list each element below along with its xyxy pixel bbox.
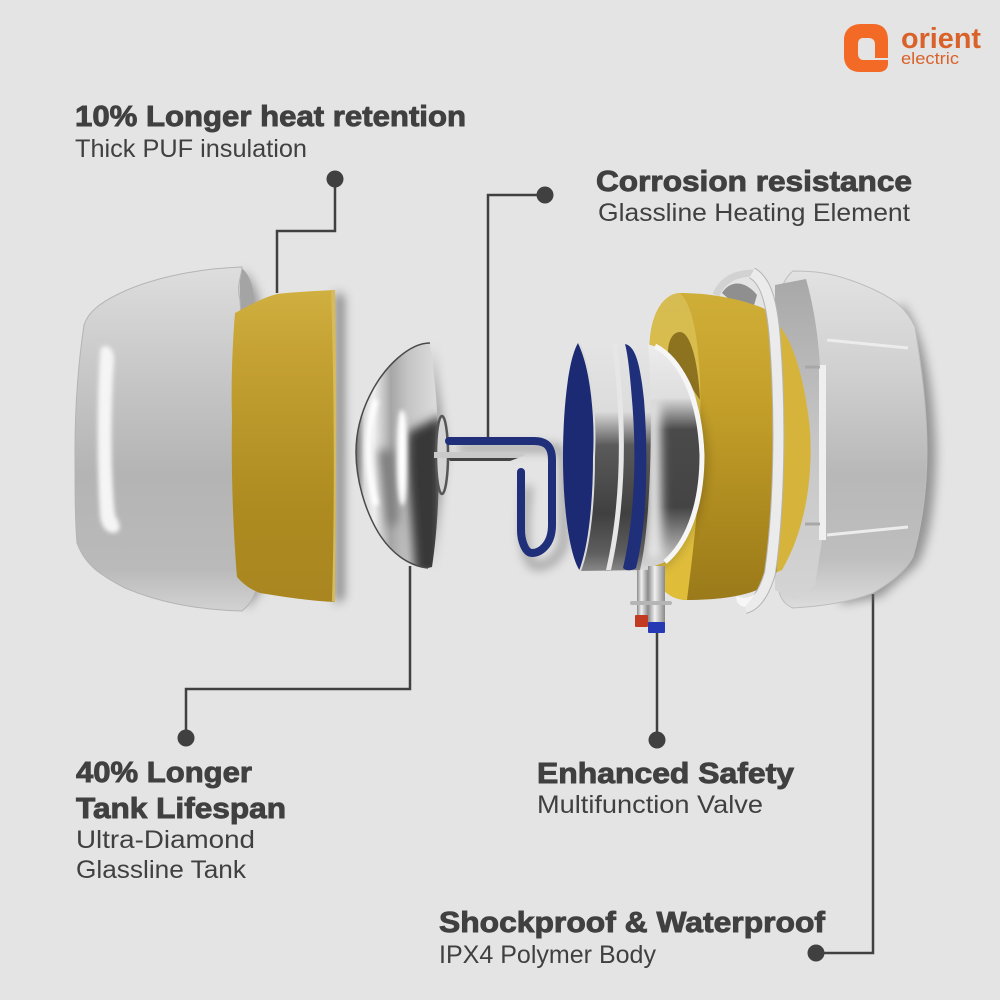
tank dome half: [356, 343, 446, 575]
connector: tank lifespan: [178, 566, 410, 746]
logo: [844, 23, 981, 72]
text: enhanced safety: Enhanced Safety: [537, 758, 794, 790]
text: shockproof: [439, 907, 825, 969]
left outer shell: [75, 267, 262, 611]
text: tank lifespan: Glassline Tank: [76, 856, 247, 884]
connector: shockproof: [808, 594, 873, 962]
right foam: [647, 293, 777, 600]
text: shockproof: IPX4 Polymer Body: [439, 941, 656, 969]
front ring: [736, 273, 778, 608]
text: corrosion resistance: Corrosion resistance: [596, 166, 912, 198]
shell body: [777, 271, 927, 608]
tank half: [563, 343, 708, 571]
text: enhanced safety: Multifunction Valve: [537, 791, 763, 819]
text: corrosion resistance: [596, 166, 912, 227]
connector: corrosion resistance: [488, 186, 554, 438]
valves: [630, 566, 672, 633]
shell white strip: [819, 365, 826, 540]
text: tank lifespan: Tank Lifespan: [76, 793, 286, 825]
tank rounded end: [640, 343, 703, 571]
flange: [436, 416, 448, 494]
text: tank lifespan: 40% Longer: [76, 757, 252, 789]
text: enhanced safety: [537, 758, 794, 819]
right outer shell: [716, 271, 936, 608]
blue rim: [623, 344, 646, 570]
text: shockproof: Shockproof & Waterproof: [439, 907, 825, 939]
heating element: [434, 416, 564, 566]
connector: enhanced safety: [648, 632, 666, 748]
shell ribs: [827, 340, 908, 535]
text: heat retention: [75, 101, 466, 163]
valve: cold: [648, 622, 665, 633]
shell inner channel: [775, 279, 822, 600]
rear ring arc: [716, 273, 755, 295]
text: corrosion resistance: Glassline Heating Element: [598, 199, 910, 227]
left foam insulation: [232, 290, 344, 604]
logo mark: [844, 24, 888, 72]
logo wordmark: orient: [901, 23, 981, 55]
blue interior: [563, 343, 594, 571]
blue tube: [449, 441, 552, 553]
connector: heat retention: [277, 170, 344, 293]
text: tank lifespan: Ultra-Diamond: [76, 826, 255, 854]
thermostat pocket: [434, 452, 525, 458]
rear foam: [770, 322, 811, 575]
valve: hot: [635, 615, 648, 627]
text: tank lifespan: [76, 757, 286, 884]
tank shadow: [640, 350, 708, 571]
steel band: [578, 343, 651, 571]
text: heat retention: Thick PUF insulation: [75, 135, 307, 163]
text: heat retention: 10% Longer heat retention: [75, 101, 466, 133]
logo: electric: [901, 49, 960, 68]
